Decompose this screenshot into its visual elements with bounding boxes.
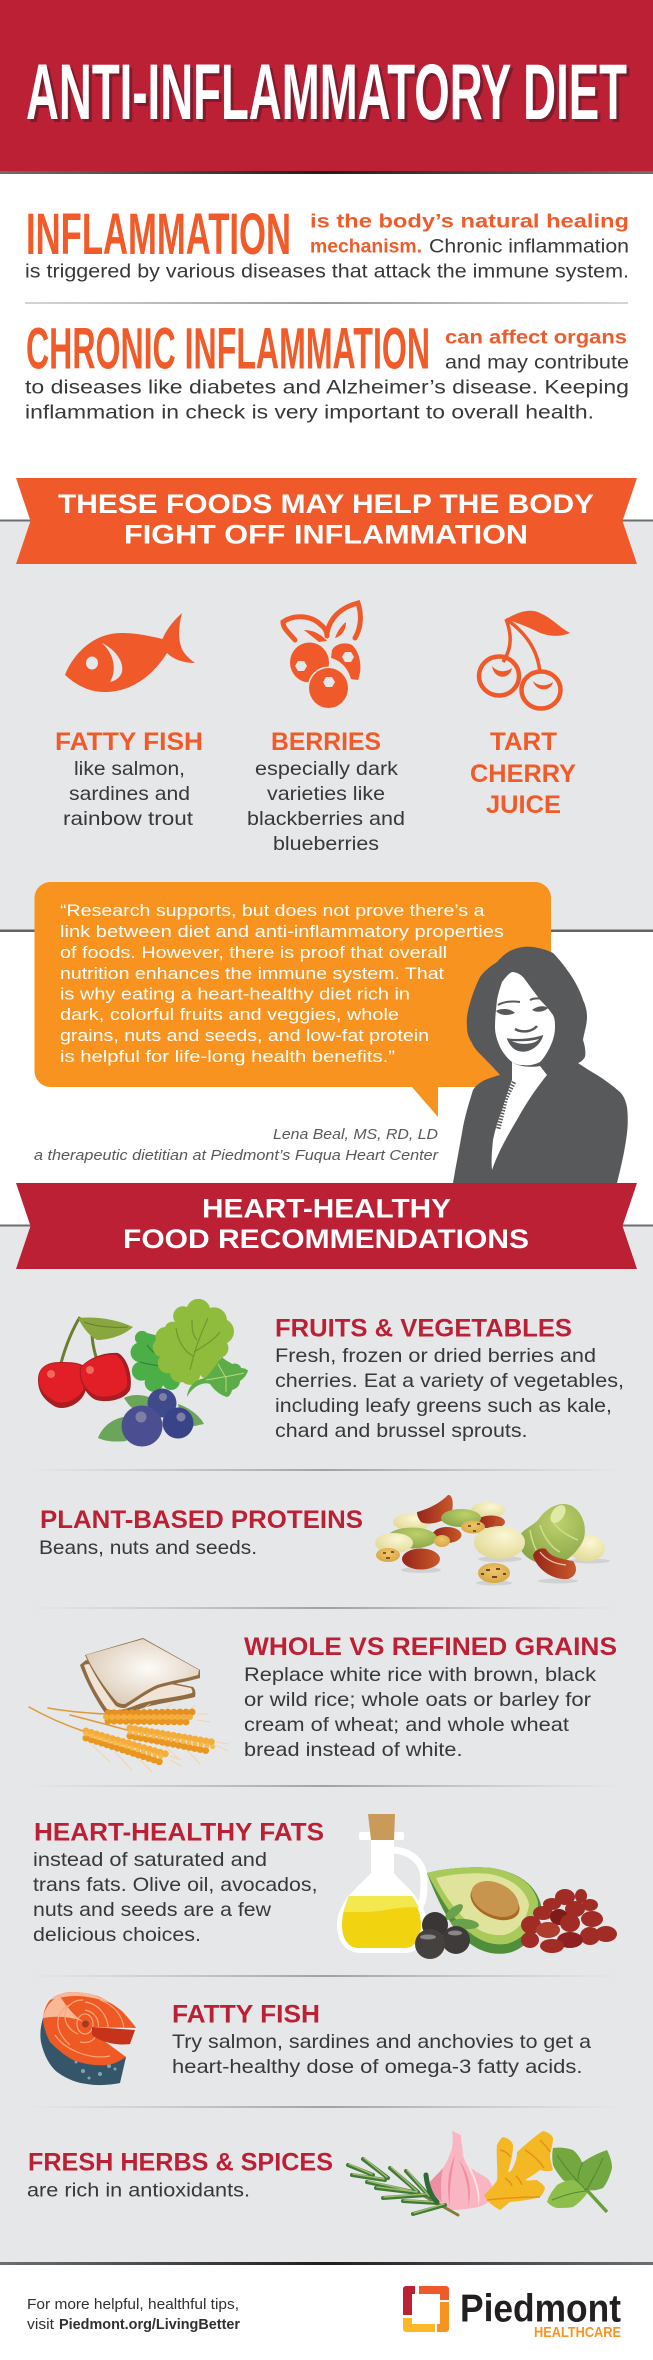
illustration: rosemary, garlic, ginger and basil xyxy=(348,2131,612,2215)
intro: chronic inflammation: and may contribute xyxy=(445,352,629,374)
intro: chronic inflammation: can affect organs xyxy=(445,326,627,348)
quote bubble xyxy=(34,882,551,1117)
footer text xyxy=(27,2296,240,2333)
text: heart-healthy fats: nuts and seeds are a few xyxy=(33,1899,272,1921)
text: plant-based proteins: Beans, nuts and seeds. xyxy=(39,1537,257,1559)
quote bubble: “Research supports, but does not prove there’s a xyxy=(60,901,485,920)
footer text: For more helpful, healthful tips, xyxy=(27,2296,239,2313)
attribution: a therapeutic dietitian at Piedmont’s Fuqua Heart Center xyxy=(34,1148,439,1164)
text: fatty fish xyxy=(172,2000,591,2078)
text: whole vs refined grains: cream of wheat; and whole wheat xyxy=(244,1714,570,1736)
quote bubble: dark, colorful fruits and veggies, whole xyxy=(60,1005,399,1024)
red ribbon banner xyxy=(16,1183,637,1269)
illustration: salmon steak xyxy=(40,1992,136,2085)
logo: Piedmont Healthcare: Piedmont xyxy=(460,2288,621,2330)
illustration: beans xyxy=(375,1495,610,1586)
footer text: visit xyxy=(27,2316,55,2333)
red ribbon banner: HEART-HEALTHY xyxy=(202,1194,451,1224)
food label: tart cherry juice: JUICE xyxy=(486,791,561,819)
sub-shape: cork xyxy=(368,1814,395,1840)
illustration: cherries, leaves and blueberries xyxy=(38,1299,248,1446)
background: grey band for recommendations xyxy=(0,1225,653,2262)
food label: fatty fish xyxy=(55,728,203,830)
quote bubble: of foods. However, there is proof that overall xyxy=(60,943,447,962)
text: whole vs refined grains: WHOLE VS REFINED GRAINS xyxy=(244,1633,617,1661)
text: fruits and vegetables: chard and brussel sprouts. xyxy=(275,1420,528,1442)
food label: berries: blueberries xyxy=(273,833,379,855)
food label: tart cherry juice xyxy=(470,728,576,819)
text: fruits and vegetables: Fresh, frozen or dried berries and xyxy=(275,1345,596,1367)
text: heart-healthy fats xyxy=(33,1818,324,1946)
orange ribbon banner xyxy=(16,478,637,564)
text: plant-based proteins: PLANT-BASED PROTEINS xyxy=(40,1506,363,1534)
text: heart-healthy fats: instead of saturated and xyxy=(33,1849,267,1871)
intro: inflammation definition: Chronic inflammation xyxy=(429,236,629,258)
food label: fatty fish: sardines and xyxy=(69,783,190,805)
food label: tart cherry juice: CHERRY xyxy=(470,760,576,788)
intro: chronic inflammation: to diseases like diabetes and Alzheimer’s disease. Keeping xyxy=(25,376,629,398)
food label: berries: especially dark xyxy=(255,758,398,780)
text: fatty fish: Try salmon, sardines and anchovies to get a xyxy=(172,2031,591,2053)
food label: fatty fish: rainbow trout xyxy=(63,808,194,830)
orange ribbon banner: THESE FOODS MAY HELP THE BODY xyxy=(58,489,594,519)
text: heart-healthy fats: delicious choices. xyxy=(33,1924,201,1946)
icon: fish xyxy=(65,613,195,692)
food label: berries xyxy=(247,728,405,855)
intro: inflammation definition: is triggered by various diseases that attack the immune system. xyxy=(25,260,629,282)
icon: cherries xyxy=(479,611,570,708)
icon: berries xyxy=(283,603,360,710)
text: fruits and vegetables xyxy=(275,1314,624,1442)
food label: berries: BERRIES xyxy=(271,728,381,756)
text: fresh herbs and spices: FRESH HERBS & SPICES xyxy=(28,2148,333,2176)
text: whole vs refined grains: or wild rice; whole oats or barley for xyxy=(244,1689,592,1711)
text: fruits and vegetables: including leafy greens such as kale, xyxy=(275,1395,612,1417)
intro: chronic inflammation xyxy=(25,316,629,424)
background: grey band for foods xyxy=(0,520,653,931)
text: fresh herbs and spices: are rich in antioxidants. xyxy=(27,2180,250,2202)
text: heart-healthy fats: HEART-HEALTHY FATS xyxy=(34,1818,324,1846)
illustration: oil, avocado, olives and beans xyxy=(337,1814,617,1959)
text: fruits and vegetables: cherries. Eat a variety of vegetables, xyxy=(275,1370,624,1392)
text: whole vs refined grains: Replace white rice with brown, black xyxy=(244,1664,596,1686)
icon: logo bracket mark xyxy=(403,2286,449,2332)
logo: Piedmont Healthcare: HEALTHCARE xyxy=(534,2325,621,2341)
intro: inflammation definition xyxy=(25,202,629,282)
attribution xyxy=(34,1127,439,1164)
food label: fatty fish: like salmon, xyxy=(74,758,185,780)
text: fruits and vegetables: FRUITS & VEGETABLES xyxy=(275,1314,572,1342)
text: whole vs refined grains xyxy=(244,1633,617,1761)
portrait: dietitian xyxy=(453,947,628,1183)
quote bubble: grains, nuts and seeds, and low-fat protein xyxy=(60,1026,429,1045)
quote bubble: is helpful for life-long health benefits.” xyxy=(60,1047,395,1066)
header banner xyxy=(0,0,653,174)
quote bubble: nutrition enhances the immune system. That xyxy=(60,964,444,983)
intro: inflammation definition: mechanism. xyxy=(310,236,422,258)
text: fatty fish: heart-healthy dose of omega-3 fatty acids. xyxy=(172,2056,582,2078)
attribution: Lena Beal, MS, RD, LD xyxy=(273,1127,438,1143)
logo: Piedmont Healthcare xyxy=(403,2286,621,2341)
sub-shape: wheat whiskers xyxy=(92,1704,228,1772)
food label: fatty fish: FATTY FISH xyxy=(55,728,203,756)
footer text: Piedmont.org/LivingBetter xyxy=(59,2316,240,2333)
text: heart-healthy fats: trans fats. Olive oil, avocados, xyxy=(33,1874,318,1896)
quote bubble: link between diet and anti-inflammatory properties xyxy=(60,922,504,941)
orange ribbon banner: FIGHT OFF INFLAMMATION xyxy=(124,520,528,550)
text: plant-based proteins xyxy=(39,1506,363,1559)
food label: berries: varieties like xyxy=(267,783,385,805)
intro: inflammation definition: is the body’s natural healing xyxy=(310,210,629,232)
food label: berries: blackberries and xyxy=(247,808,405,830)
text: fresh herbs and spices xyxy=(27,2148,333,2202)
red ribbon banner: FOOD RECOMMENDATIONS xyxy=(123,1224,529,1254)
sub-shape: rosemary sprig xyxy=(348,2158,458,2215)
intro: chronic inflammation: inflammation in check is very important to overall health. xyxy=(25,402,594,424)
heading: inflammation: INFLAMMATION xyxy=(26,202,291,267)
text: fatty fish: FATTY FISH xyxy=(172,2000,320,2028)
quote bubble: is why eating a heart-healthy diet rich in xyxy=(60,984,410,1004)
food label: tart cherry juice: TART xyxy=(490,728,557,756)
illustration: bread and wheat xyxy=(29,1638,228,1772)
text: whole vs refined grains: bread instead of white. xyxy=(244,1739,462,1761)
